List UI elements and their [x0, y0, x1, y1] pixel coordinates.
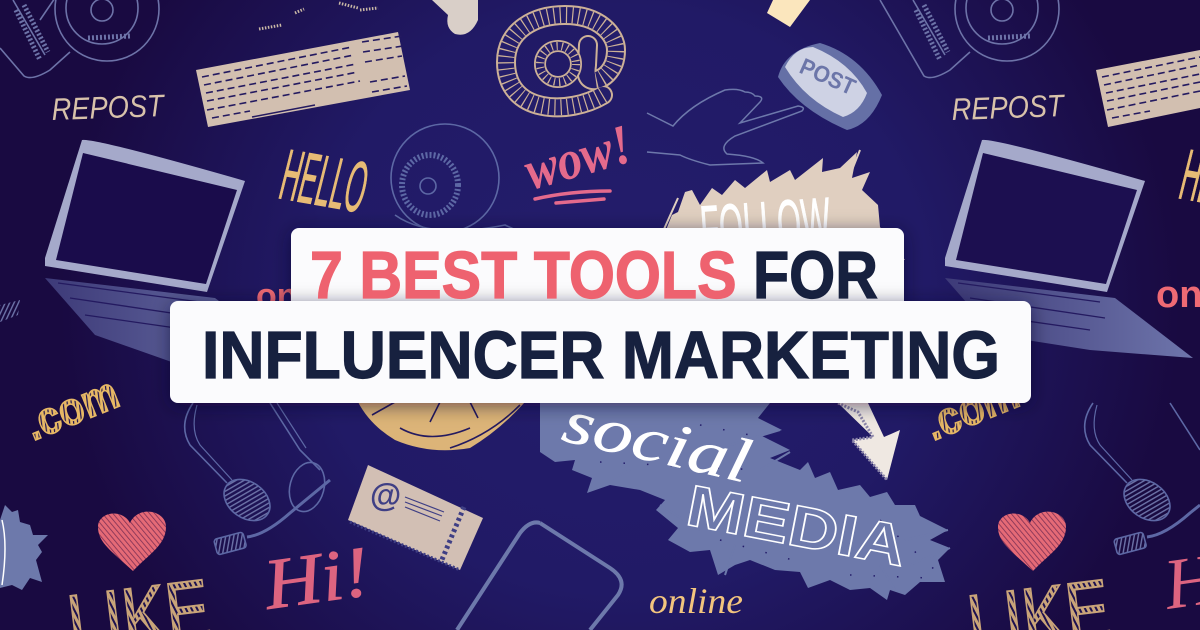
infographic canvas: HELLO: [275, 135, 373, 229]
icon: webcam: [391, 124, 520, 232]
icon: tablet: [457, 522, 622, 630]
icon: camera left: [0, 0, 159, 78]
icon: camera right: [880, 0, 1059, 78]
icon: arrow: [838, 403, 900, 480]
icon: business card: [348, 465, 483, 570]
title box line one: [291, 228, 904, 318]
title box line two: [170, 301, 1031, 403]
icon: keyboard right: [1096, 50, 1200, 127]
icon: at sign: [506, 15, 616, 107]
icon: post stamp: POST: [796, 53, 860, 100]
icon: mouse fragment top: [432, 0, 478, 35]
icon: eraser fragment top: [767, 0, 810, 27]
text: online bottom: online: [649, 581, 743, 621]
icon: headset left: [185, 403, 330, 555]
icon: heart left: [98, 512, 166, 571]
text: dot com right: .com: [917, 366, 1026, 450]
title text line one: 7 BEST TOOLS FOR: [310, 238, 878, 313]
text: dot com left: .com: [17, 366, 126, 450]
scribble: left edge: [0, 505, 48, 590]
icon: burger mouse: [358, 402, 525, 450]
icon: heart right: [998, 512, 1066, 571]
text: hi: Hi!: [258, 531, 374, 625]
text: repost left: REPOST: [51, 88, 166, 127]
icon: post stamp: [778, 43, 882, 130]
small sketch fragments: [259, 3, 378, 29]
scribble: social and media band: [540, 387, 950, 600]
scribble: follow: [660, 150, 905, 266]
title text line two: INFLUENCER MARKETING: [202, 318, 1000, 393]
icon: keyboard left: [196, 32, 410, 127]
title panel: [170, 228, 1031, 403]
text: repost right: REPOST: [951, 88, 1066, 127]
hatch fragment left edge: [0, 300, 20, 322]
icon: business card: @: [370, 477, 401, 513]
text: social: social: [557, 387, 757, 496]
text: wow: wow!: [517, 113, 638, 202]
icon: laptop left: [45, 140, 300, 372]
icon: pointing hand: [647, 89, 803, 165]
text: online partial left: on: [256, 277, 298, 315]
icon: laptop right: [945, 140, 1193, 358]
icon: headset right: [1085, 403, 1200, 555]
scribble: follow: FOLLOW: [698, 183, 833, 266]
text: media: MEDIA: [682, 473, 912, 579]
